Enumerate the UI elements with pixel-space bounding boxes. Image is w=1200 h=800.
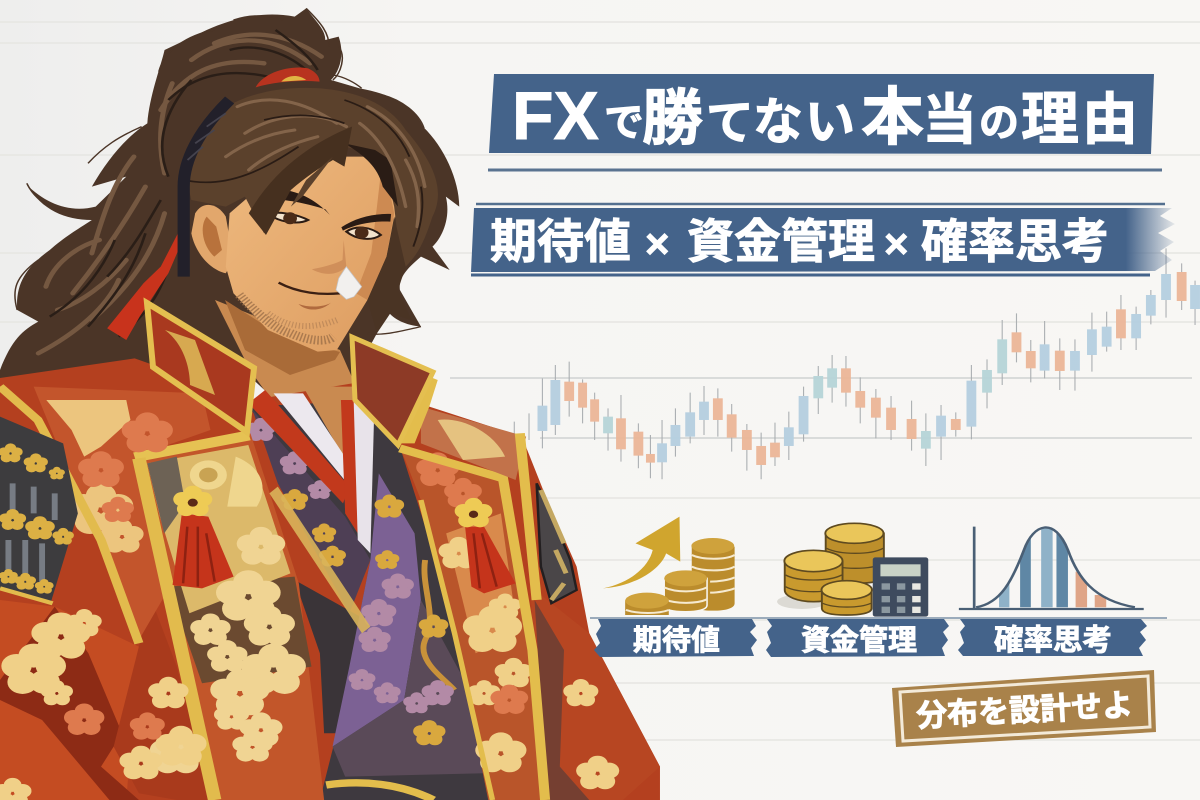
title underline [488,168,1162,172]
label: expected value [594,619,757,657]
eyebrows [264,190,391,231]
right lapel panel [400,447,543,800]
character: samurai [0,8,459,478]
wisps [15,8,424,334]
right tassel [455,498,516,593]
title banner: 勝 [642,84,703,152]
label: probabilistic thinking [958,619,1147,657]
stamp: design the distribution: 分布を設計せよ [915,687,1134,734]
icon: money management [777,523,928,617]
left tassel [173,486,234,588]
base red robe [0,358,660,800]
front hair [187,88,438,267]
right collar [352,337,433,445]
label: money management [766,619,949,657]
subtitle banner: 確率思考 [921,215,1109,268]
left collar [147,303,254,432]
right shoulder panel [421,407,526,480]
icon: probability distribution [959,517,1144,610]
label: expected value: 期待値 [633,624,720,657]
white and red inner collar [248,387,375,553]
back hair and ponytail [0,8,459,393]
ear [191,205,233,273]
left shoulder panel [34,387,210,640]
stubble [239,295,334,340]
neck [215,300,362,478]
subtitle banner [471,204,1175,275]
nose [312,240,346,274]
high collars [147,303,433,445]
title banner: FX [512,78,599,154]
red hair ribbon [107,67,320,340]
icon: expected value [603,517,735,615]
title banner: 本 [861,83,924,153]
face [184,88,438,352]
gold scrolls on shoulder [46,400,144,553]
subtitle banner: 資金管理 [687,215,875,268]
candlestick chart [514,248,1200,479]
gold shoulder trim [0,387,139,643]
subtitle banner: × [884,220,909,267]
title banner [489,74,1154,154]
subtitle banner: 期待値 [490,215,631,268]
purple strip [333,473,421,747]
stamp: design the distribution [892,670,1156,747]
left lapel panel [133,433,324,800]
inner kimono [248,400,505,800]
tissue in nose [336,267,362,299]
dark hair strands [50,30,318,337]
left armor pauldron [0,417,78,603]
title banner: で [604,101,644,145]
right collar tip [398,373,438,443]
title banner: 理 [1021,87,1079,152]
gold swirl stripe [423,560,455,690]
subtitle banner: × [645,220,670,267]
label: money management: 資金管理 [801,624,917,657]
title banner: 当 [922,89,977,151]
right armor plates [537,483,577,603]
title banner: い [805,94,855,150]
sleeve folds [0,587,660,800]
title banner: な [753,94,803,150]
title banner: の [979,101,1019,145]
gold belt [326,783,434,800]
hair highlights [38,35,321,353]
label: probabilistic thinking: 確率思考 [994,624,1112,657]
title banner: て [706,97,754,150]
title banner: 由 [1082,88,1138,151]
kimono body [0,358,660,800]
mouth [279,283,340,294]
sleeve flowers [0,609,619,800]
eyes [268,212,308,222]
